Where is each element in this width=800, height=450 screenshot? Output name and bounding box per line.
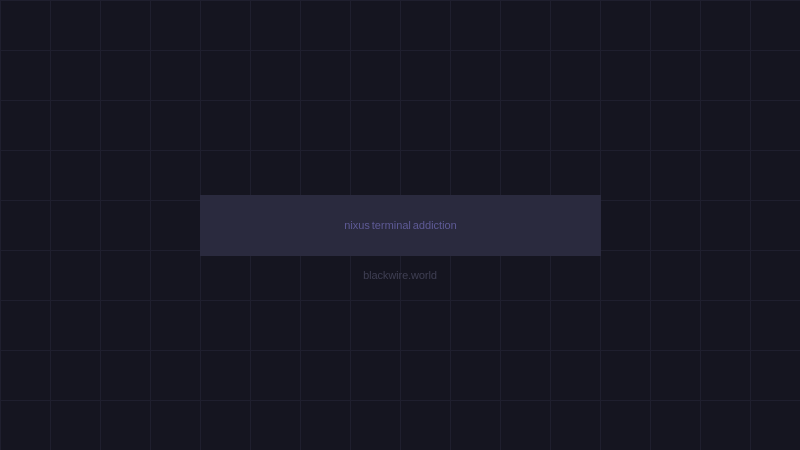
panel: title banner xyxy=(200,195,601,256)
text: site name: blackwire.world xyxy=(363,270,437,282)
title: nixus terminal addiction xyxy=(344,220,457,232)
